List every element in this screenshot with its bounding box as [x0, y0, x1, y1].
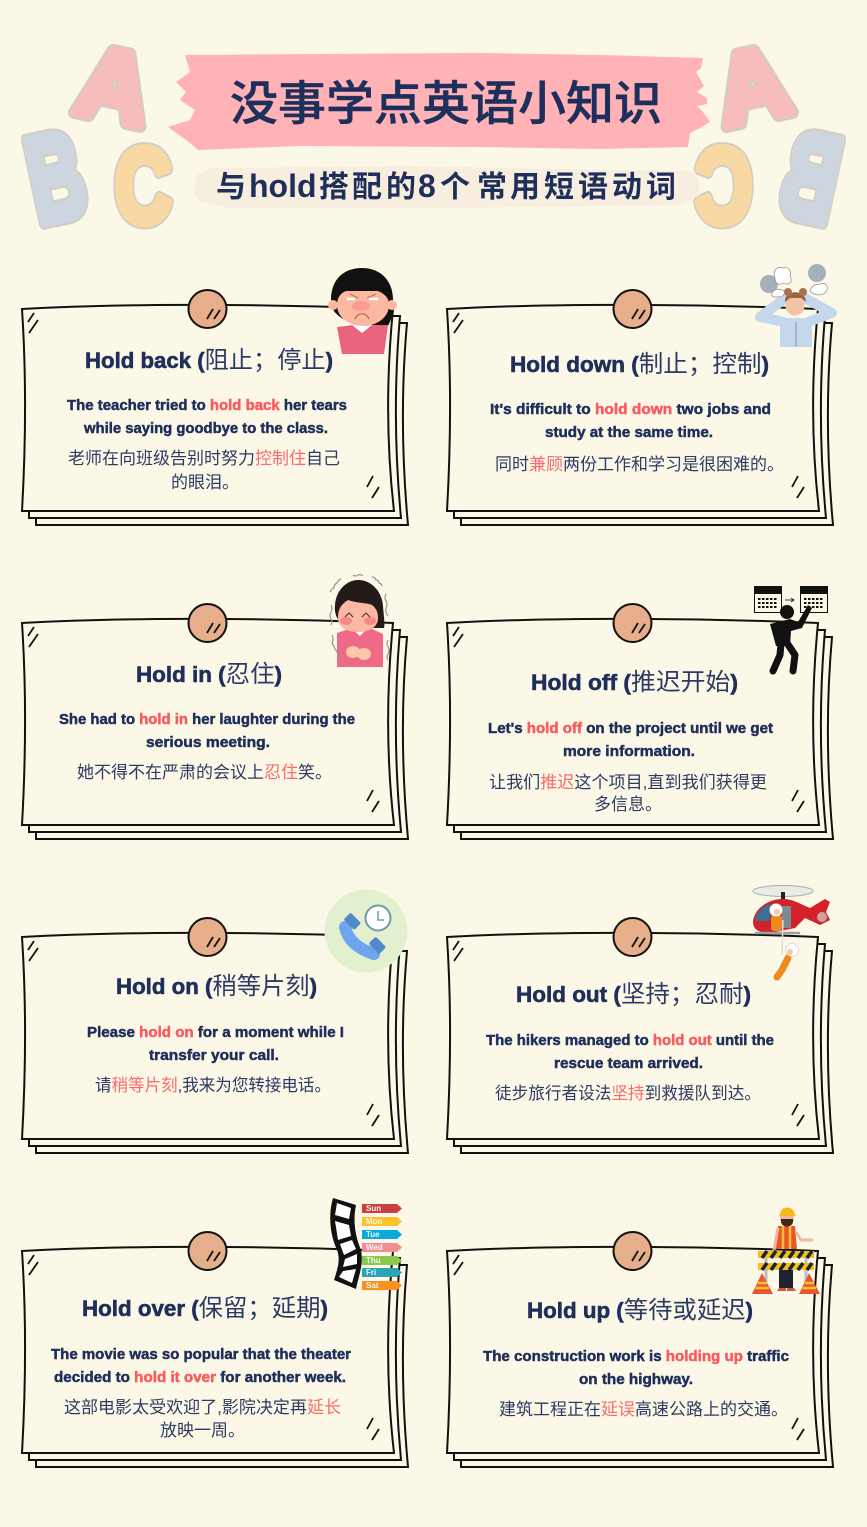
card frame [447, 604, 833, 839]
subtitle text: 动 [612, 171, 642, 204]
translation: 老师在向班级告别时努力控制住自己 [68, 449, 340, 468]
panel: hold off [447, 586, 833, 839]
example sentence: Let's hold off on the project until we get [488, 720, 773, 737]
example sentence: Please hold on for a moment while I [87, 1024, 344, 1041]
icon: weekday arrows [362, 1204, 402, 1290]
translation [489, 773, 767, 814]
icon: weekday arrows: Wed [366, 1243, 383, 1252]
subtitle text: 语 [578, 171, 608, 204]
card frame [447, 1232, 833, 1467]
example sentence [51, 1346, 351, 1386]
example sentence [488, 720, 773, 760]
example sentence: decided to hold it over for another week. [54, 1369, 346, 1386]
pink brush stroke [168, 53, 710, 150]
heading: Hold over (保留；延期) [82, 1295, 328, 1322]
panel: hold back [22, 268, 408, 525]
subtitle text: 8 [418, 168, 436, 204]
icon: shaking woman [330, 575, 389, 667]
translation: 放映一周。 [160, 1421, 245, 1440]
translation: 多信息。 [594, 795, 662, 814]
example sentence [59, 711, 355, 751]
icon: person moving calendar [754, 586, 828, 671]
translation: 请稍等片刻,我来为您转接电话。 [95, 1076, 331, 1095]
example sentence: She had to hold in her laughter during the [59, 711, 355, 728]
subtitle text: 词 [646, 171, 676, 204]
example sentence: It's difficult to hold down two jobs and [490, 401, 771, 418]
title banner [168, 53, 710, 150]
subtitle text: 搭 [319, 171, 349, 204]
translation: 这部电影太受欢迎了,影院决定再延长 [64, 1398, 341, 1417]
translation: 同时兼顾两份工作和学习是很困难的。 [495, 455, 784, 474]
subtitle text: 与 [216, 171, 246, 204]
card frame [22, 1232, 408, 1467]
heading: Hold in (忍住) [136, 661, 282, 688]
panel: hold in [22, 575, 408, 839]
icon: weekday arrows: Mon [366, 1217, 383, 1226]
icon: construction worker [752, 1208, 820, 1294]
title text: 没事学点英语小知识 [230, 77, 662, 130]
panel: hold on [22, 890, 408, 1153]
card frame [447, 918, 833, 1153]
card frame [22, 918, 408, 1153]
heading: Hold on (稍等片刻) [116, 973, 317, 1000]
icon: phone and clock [324, 890, 408, 972]
icon: angry woman [328, 268, 397, 354]
subtitle banner [193, 166, 700, 208]
heading: Hold back (阻止；停止) [85, 347, 333, 374]
translation: 她不得不在严肃的会议上忍住笑。 [77, 763, 332, 782]
subtitle text: 个 [440, 171, 470, 204]
icon: film strip [330, 1198, 362, 1289]
heading: Hold down (制止；控制) [510, 351, 769, 378]
panel: hold over [22, 1198, 408, 1467]
example sentence: more information. [563, 743, 695, 760]
example sentence [486, 1032, 774, 1072]
subtitle text: 短 [544, 171, 574, 204]
example sentence: serious meeting. [146, 734, 270, 751]
example sentence: The teacher tried to hold back her tears [67, 397, 347, 414]
panel: hold out [447, 886, 833, 1153]
card frame [447, 290, 833, 525]
cream brush stroke [193, 166, 700, 208]
example sentence: while saying goodbye to the class. [83, 420, 328, 437]
example sentence: study at the same time. [545, 424, 713, 441]
decoration: letters ABC right [696, 24, 852, 250]
example sentence: transfer your call. [149, 1047, 279, 1064]
translation: 建筑工程正在延误高速公路上的交通。 [499, 1400, 788, 1419]
icon: rescue helicopter [753, 886, 830, 977]
example sentence: The movie was so popular that the theater [51, 1346, 351, 1363]
example sentence: The hikers managed to hold out until the [486, 1032, 774, 1049]
icon: weekday arrows: Sun [366, 1204, 381, 1213]
subtitle text: 常 [477, 171, 507, 204]
example sentence [87, 1024, 344, 1064]
icon: weekday arrows: Fri [366, 1268, 376, 1277]
heading: Hold up (等待或延迟) [527, 1297, 753, 1324]
heading: Hold out (坚持；忍耐) [516, 981, 751, 1008]
subtitle text: 的 [386, 171, 416, 204]
icon: stressed man [760, 264, 832, 347]
subtitle text: 用 [510, 171, 540, 204]
example sentence [490, 401, 771, 441]
decoration: letters ABC left [15, 24, 171, 250]
subtitle text: hold [249, 168, 317, 204]
translation: 让我们推迟这个项目,直到我们获得更 [489, 773, 767, 792]
example sentence: The construction work is holding up traffic [483, 1348, 789, 1365]
icon: weekday arrows: Sat [366, 1281, 379, 1290]
icon: weekday arrows: Tue [366, 1230, 380, 1239]
icon: weekday arrows: Thu [366, 1256, 381, 1265]
translation [64, 1398, 341, 1440]
example sentence: on the highway. [579, 1371, 693, 1388]
card frame [22, 604, 408, 839]
heading: Hold off (推迟开始) [531, 669, 738, 696]
translation: 徒步旅行者设法坚持到救援队到达。 [495, 1084, 761, 1103]
panel: hold up [447, 1208, 833, 1467]
translation: 的眼泪。 [171, 473, 239, 492]
panel: hold down [447, 264, 833, 525]
example sentence [483, 1348, 789, 1388]
card frame [22, 290, 408, 525]
translation [68, 449, 340, 492]
subtitle text: 配 [352, 171, 382, 204]
example sentence [67, 397, 347, 437]
example sentence: rescue team arrived. [554, 1055, 703, 1072]
